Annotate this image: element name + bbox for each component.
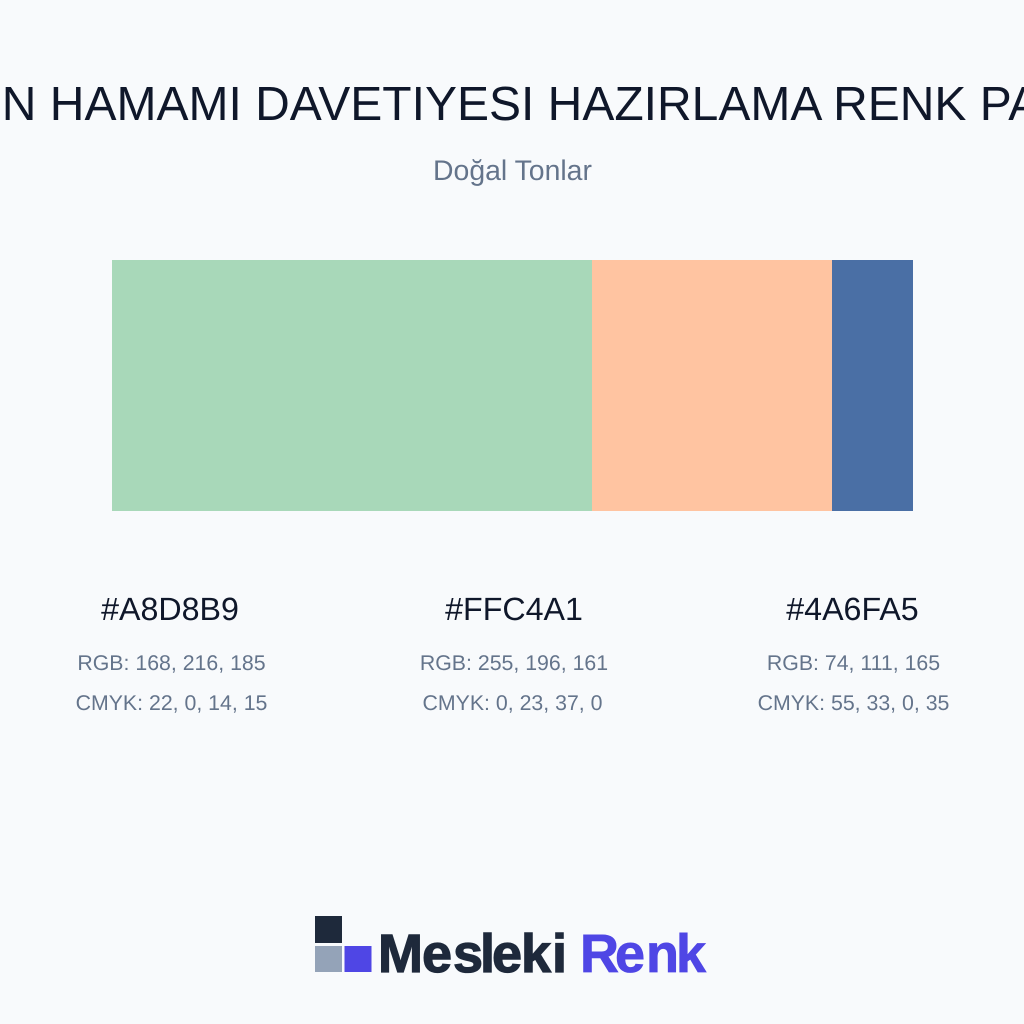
swatch: green [112,260,592,511]
swatch: blue [832,260,913,511]
logo wordmark: Renk [580,924,707,984]
logo mark [315,916,372,972]
rgb value: RGB: 74, 111, 165 [767,651,940,675]
hex code: #A8D8B9 [101,591,239,627]
colour details: peach [420,591,608,715]
logo wordmark [378,924,707,984]
hex code: #4A6FA5 [786,591,919,627]
cmyk value: CMYK: 55, 33, 0, 35 [758,691,949,715]
colour details: green [76,591,267,715]
proportional colour bar [112,260,913,511]
rgb value: RGB: 255, 196, 161 [420,651,608,675]
rgb value: RGB: 168, 216, 185 [77,651,266,675]
colour details: blue [758,591,949,715]
cmyk value: CMYK: 0, 23, 37, 0 [423,691,603,715]
subtitle: Doğal Tonlar [433,155,592,187]
hex code: #FFC4A1 [445,591,583,627]
swatch: peach [592,260,832,511]
logo [315,916,707,984]
cmyk value: CMYK: 22, 0, 14, 15 [76,691,267,715]
logo wordmark: Mesleki [378,924,567,984]
